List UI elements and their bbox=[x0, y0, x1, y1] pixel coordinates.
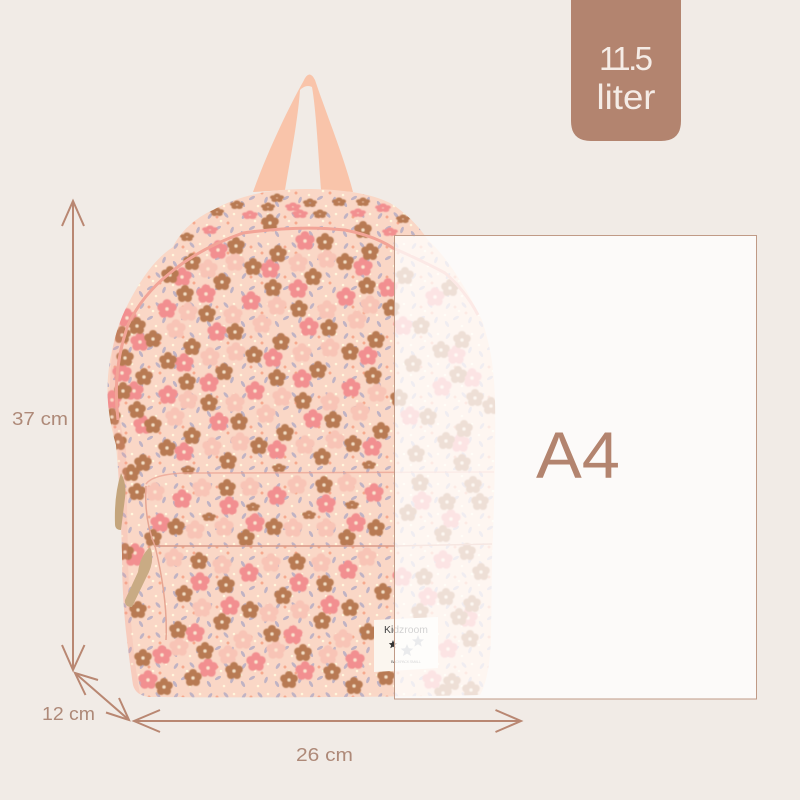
backpack top handle bbox=[253, 74, 353, 192]
A4 paper overlay bbox=[394, 236, 756, 699]
A4 paper overlay: A4 bbox=[536, 418, 620, 492]
main zipper seam bbox=[116, 228, 478, 420]
top flap squished flowers bbox=[180, 194, 410, 241]
brand label: Kidzroom bbox=[384, 625, 428, 636]
arrow: width bbox=[134, 710, 521, 732]
backpack illustration bbox=[100, 74, 500, 701]
arrow: height bbox=[62, 201, 84, 670]
pink flowers bbox=[102, 231, 482, 689]
label: 26 cm: 26 cm bbox=[296, 745, 353, 765]
left gusset shading bbox=[114, 320, 136, 695]
badge: 11.5 liter volume bbox=[571, 0, 681, 141]
front pocket seams bbox=[146, 472, 494, 640]
label: 37 cm: 37 cm bbox=[12, 409, 68, 429]
arrow: depth bbox=[75, 673, 129, 720]
brown flowers bbox=[103, 233, 500, 701]
light pink flowers bbox=[145, 249, 387, 664]
brand label: BACKPACK SMALL bbox=[391, 659, 422, 664]
badge: 11.5 liter volume: liter bbox=[596, 78, 656, 117]
label: 12 cm: 12 cm bbox=[42, 704, 95, 724]
zipper pull upper bbox=[115, 473, 126, 530]
zipper pull lower bbox=[125, 547, 152, 607]
backpack body with floral print bbox=[100, 185, 500, 701]
brand label bbox=[374, 617, 438, 672]
badge: 11.5 liter volume: 11.5 bbox=[599, 40, 653, 77]
